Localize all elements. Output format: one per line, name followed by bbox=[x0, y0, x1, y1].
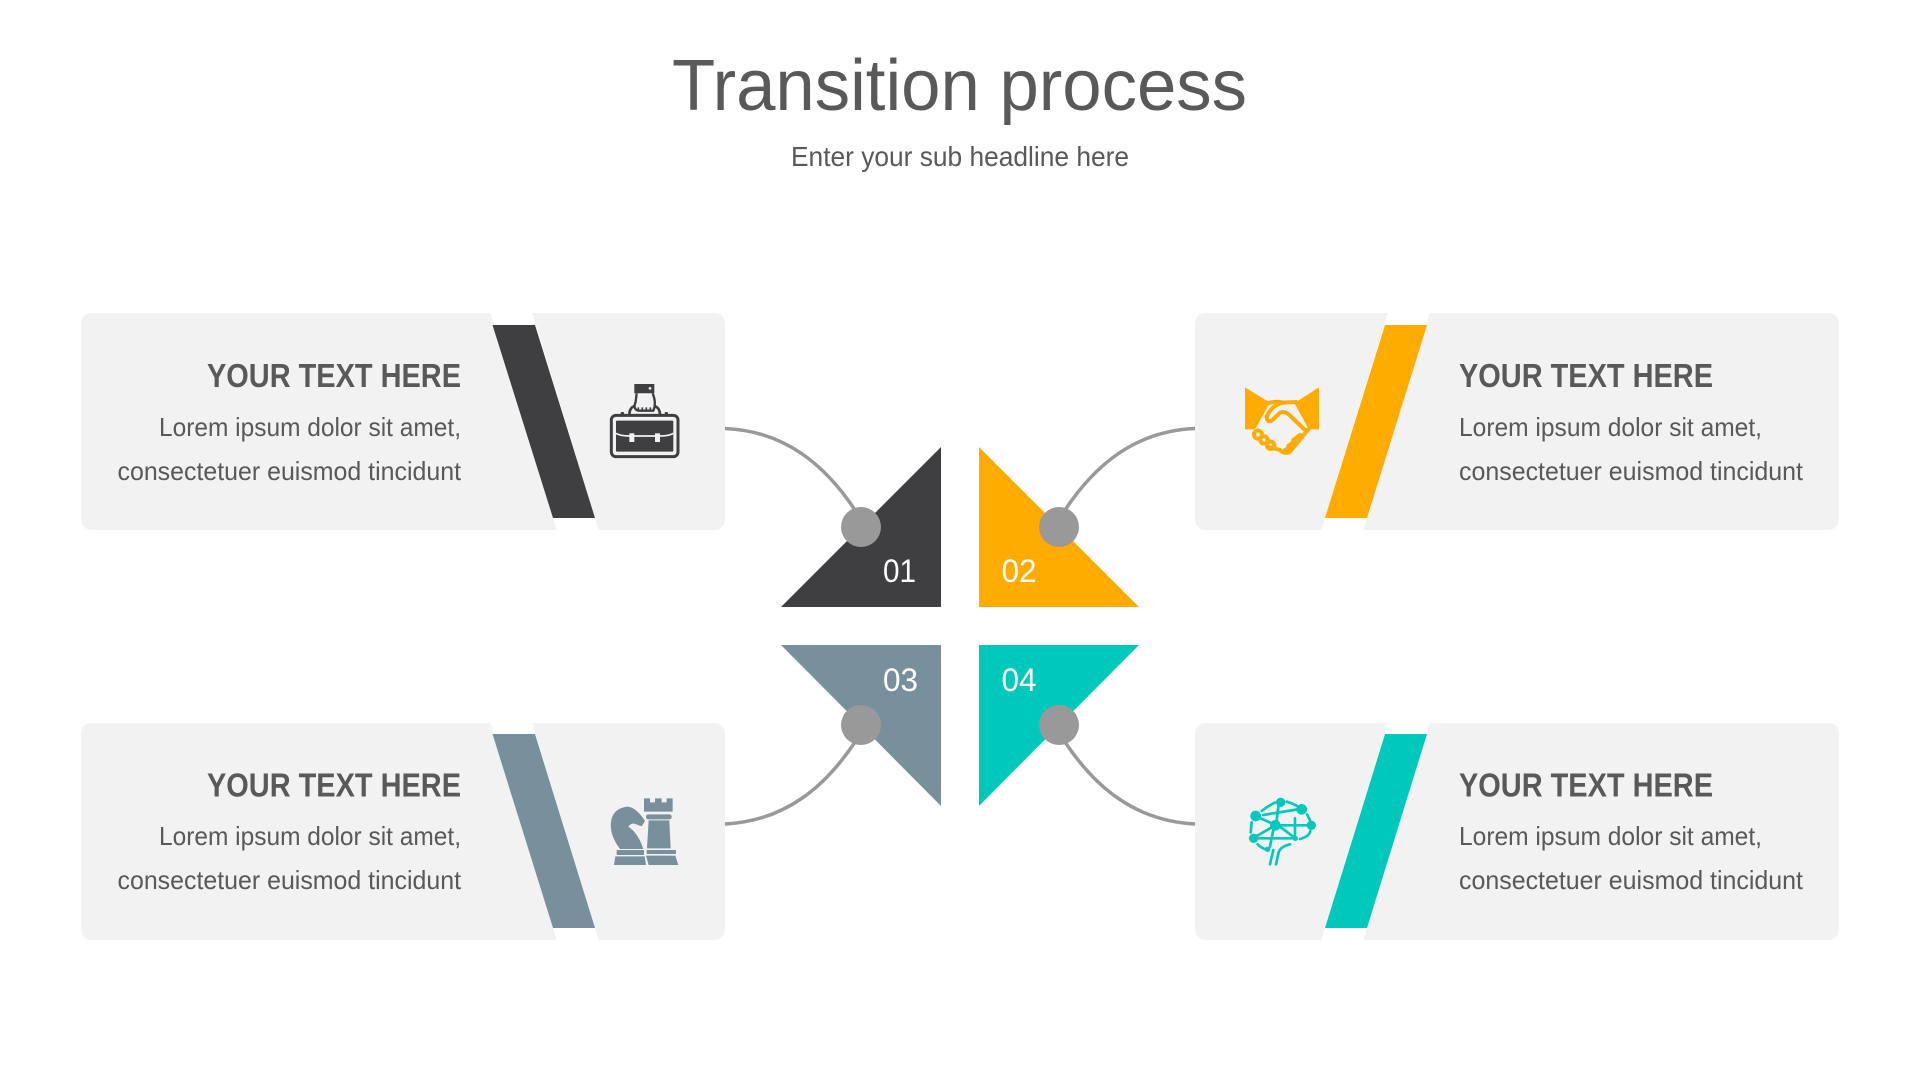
heading 01: YOUR TEXT HERE bbox=[207, 357, 461, 394]
triangle 01 bbox=[781, 447, 941, 607]
heading 04: YOUR TEXT HERE bbox=[1459, 766, 1713, 804]
number 04: 04 bbox=[1002, 662, 1036, 698]
body line 04b: consectetuer euismod tincidunt bbox=[1459, 865, 1804, 895]
card background 04 bbox=[1195, 723, 1839, 940]
title: Transition process bbox=[672, 46, 1247, 126]
card gap 04 bbox=[1321, 722, 1430, 941]
panel: step 04 bbox=[1195, 722, 1839, 941]
number 02: 02 bbox=[1002, 553, 1036, 589]
icon: brain network bbox=[1249, 798, 1316, 864]
slash accent 02 bbox=[1325, 325, 1427, 518]
node circle 04 bbox=[1039, 705, 1079, 745]
heading 03: YOUR TEXT HERE bbox=[207, 766, 461, 804]
connector curve 04 bbox=[1065, 742, 1195, 824]
body line 01a: Lorem ipsum dolor sit amet, bbox=[159, 412, 461, 442]
node circle 03 bbox=[841, 705, 881, 745]
icon: chess pieces bbox=[611, 798, 678, 865]
body line 02a: Lorem ipsum dolor sit amet, bbox=[1459, 412, 1762, 442]
node circle 01 bbox=[841, 507, 881, 547]
body line 02b: consectetuer euismod tincidunt bbox=[1459, 456, 1804, 486]
body line 04a: Lorem ipsum dolor sit amet, bbox=[1459, 821, 1762, 851]
triangle 03 bbox=[781, 645, 941, 806]
triangle 04 bbox=[979, 645, 1139, 806]
panel: step 01 bbox=[81, 312, 725, 531]
card gap 03 bbox=[490, 722, 599, 941]
node circle 02 bbox=[1039, 507, 1079, 547]
connector curve 01 bbox=[725, 428, 855, 510]
triangle 02 bbox=[979, 447, 1139, 607]
heading 02: YOUR TEXT HERE bbox=[1459, 357, 1713, 394]
slash accent 03 bbox=[492, 734, 595, 928]
number 03: 03 bbox=[883, 662, 918, 698]
body line 03b: consectetuer euismod tincidunt bbox=[118, 865, 462, 895]
card background 01 bbox=[81, 313, 725, 530]
subtitle: Enter your sub headline here bbox=[791, 141, 1129, 172]
icon: briefcase in hand bbox=[611, 384, 678, 457]
connector curve 03 bbox=[725, 742, 855, 824]
slash accent 04 bbox=[1325, 734, 1427, 928]
connector curve 02 bbox=[1065, 428, 1195, 510]
card background 03 bbox=[81, 723, 725, 940]
card gap 02 bbox=[1321, 312, 1430, 531]
slash accent 01 bbox=[492, 325, 595, 518]
number 01: 01 bbox=[883, 553, 916, 589]
body line 01b: consectetuer euismod tincidunt bbox=[118, 456, 462, 486]
card gap 01 bbox=[490, 312, 599, 531]
body line 03a: Lorem ipsum dolor sit amet, bbox=[159, 821, 461, 851]
panel: step 02 bbox=[1195, 312, 1839, 531]
icon: handshake bbox=[1245, 387, 1319, 453]
panel: step 03 bbox=[81, 722, 725, 941]
card background 02 bbox=[1195, 313, 1839, 530]
